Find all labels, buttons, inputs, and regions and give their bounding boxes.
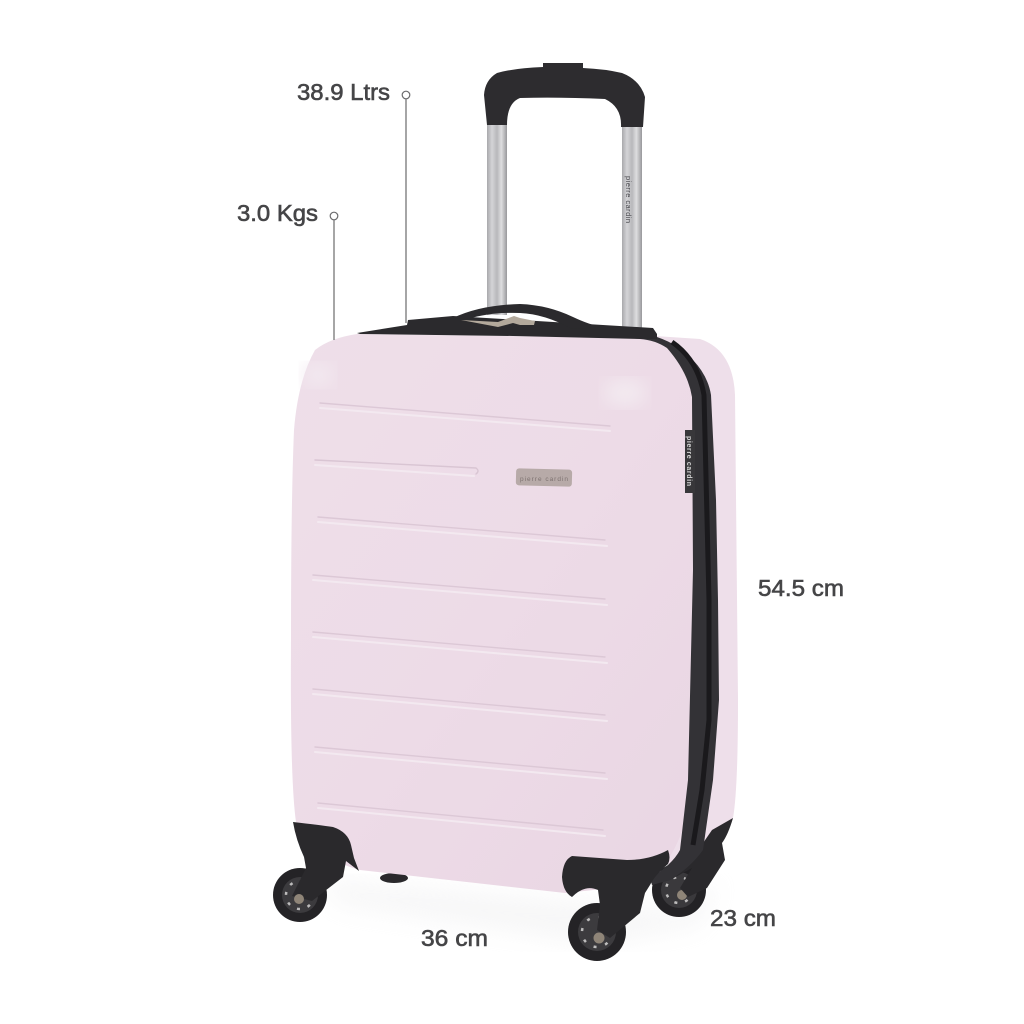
label: height: 54.5 cm [758, 575, 844, 601]
axle [294, 894, 304, 904]
callout line [402, 91, 410, 323]
label: depth: 23 cm [710, 905, 776, 931]
label: volume [297, 79, 410, 323]
top carry handle and frame [357, 304, 657, 339]
rear back caster [652, 818, 733, 917]
label: volume: 38.9 Ltrs [297, 79, 390, 105]
moulded ridges [313, 403, 610, 836]
housing [655, 818, 733, 897]
wheel [568, 903, 626, 961]
carry strap [453, 304, 602, 329]
metal logo badge: pierre cardin [520, 476, 568, 483]
right pole [622, 122, 642, 328]
label: weight [237, 200, 338, 340]
hidden rear caster [380, 873, 408, 883]
housing [562, 850, 670, 938]
lock and keys [461, 316, 535, 327]
zipper brand tag: pierre cardin [685, 436, 692, 486]
brand on pole: pierre cardin [624, 176, 633, 223]
floor shadow [320, 880, 720, 945]
zipper brand tag [685, 430, 695, 493]
frame band [357, 316, 657, 339]
telescopic trolley handle [484, 63, 645, 328]
label: width: 36 cm [421, 925, 488, 951]
front shell of suitcase [291, 334, 700, 893]
corner highlight right [603, 379, 647, 407]
housing [292, 822, 359, 901]
left front caster [273, 822, 359, 922]
handle grip [484, 63, 645, 127]
metal logo badge [516, 468, 572, 487]
back shell of suitcase [655, 336, 738, 875]
left pole [487, 120, 507, 315]
corner highlight left [302, 363, 334, 387]
label: weight: 3.0 Kgs [237, 200, 318, 226]
callout line [330, 212, 338, 340]
axle [594, 932, 604, 944]
wheel [273, 868, 327, 922]
zipper [640, 335, 719, 885]
right front caster [562, 850, 670, 961]
wheel [652, 863, 706, 917]
